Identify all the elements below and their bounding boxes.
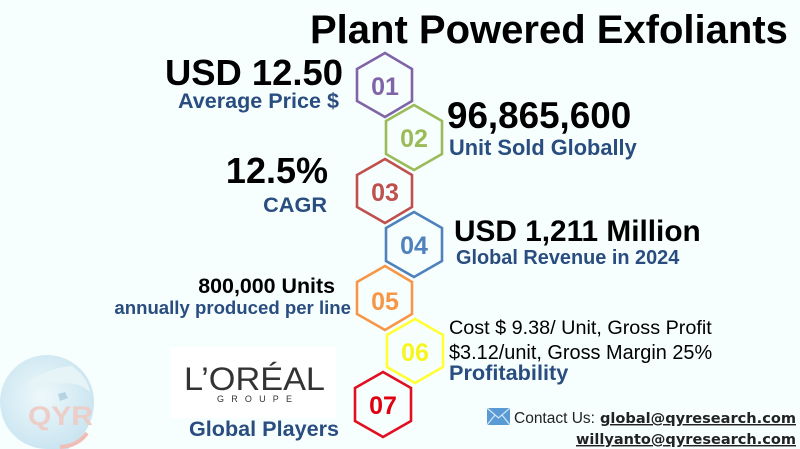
hexagon 05: 05	[371, 288, 399, 316]
stat: profitability: Cost $ 9.38/ Unit, Gross Profit	[449, 317, 712, 339]
stat: CAGR	[226, 150, 328, 217]
hexagon 03: 03	[371, 179, 399, 207]
logo: L'Oreal Groupe	[170, 347, 336, 418]
logo: L'Oreal Groupe: L’ORÉAL	[184, 361, 325, 397]
hexagon 07: 07	[369, 392, 397, 420]
hexagon 06: 06	[401, 339, 429, 367]
stat: production per line: annually produced per line	[114, 297, 351, 318]
title: Plant Powered Exfoliants	[310, 8, 788, 52]
hexagon 02: 02	[400, 125, 428, 153]
hexagon 03	[357, 159, 412, 223]
hexagon 06	[387, 319, 443, 383]
stat: average price	[165, 52, 343, 113]
stat: profitability: Profitability	[449, 360, 568, 385]
hexagon 02	[386, 105, 442, 170]
hexagon 01	[357, 53, 412, 117]
contact text	[514, 410, 796, 448]
contact text: global@qyresearch.com	[600, 411, 796, 427]
watermark: QYR globe logo: QYR	[28, 401, 93, 431]
heading: global players: Global Players	[189, 416, 339, 441]
logo: L'Oreal Groupe: GROUPE	[217, 394, 292, 404]
hexagon 07	[355, 372, 411, 437]
watermark: QYR globe logo	[0, 355, 94, 449]
hexagon 01: 01	[371, 73, 399, 101]
stat: CAGR: 12.5%	[226, 150, 328, 191]
stat: profitability: $3.12/unit, Gross Margin 25%	[449, 342, 712, 364]
hexagon 04	[386, 212, 442, 277]
hexagon 04: 04	[400, 232, 428, 260]
stat: CAGR: CAGR	[263, 192, 327, 217]
stat: production per line	[114, 274, 351, 318]
stat: global revenue	[454, 215, 701, 269]
stat: average price: USD 12.50	[165, 52, 343, 93]
stat: global revenue: USD 1,211 Million	[454, 215, 701, 248]
stat: units sold: Unit Sold Globally	[449, 135, 637, 160]
contact text: willyanto@qyresearch.com	[576, 432, 796, 448]
stat: global revenue: Global Revenue in 2024	[456, 247, 679, 269]
contact text: Contact Us:	[514, 410, 595, 427]
hexagon 05	[357, 266, 412, 330]
stat: units sold	[447, 95, 637, 160]
stat: profitability	[449, 317, 712, 385]
stat: units sold: 96,865,600	[447, 95, 631, 136]
stat: production per line: 800,000 Units	[198, 274, 335, 298]
icon: envelope	[487, 408, 510, 425]
stat: average price: Average Price $	[178, 90, 339, 113]
